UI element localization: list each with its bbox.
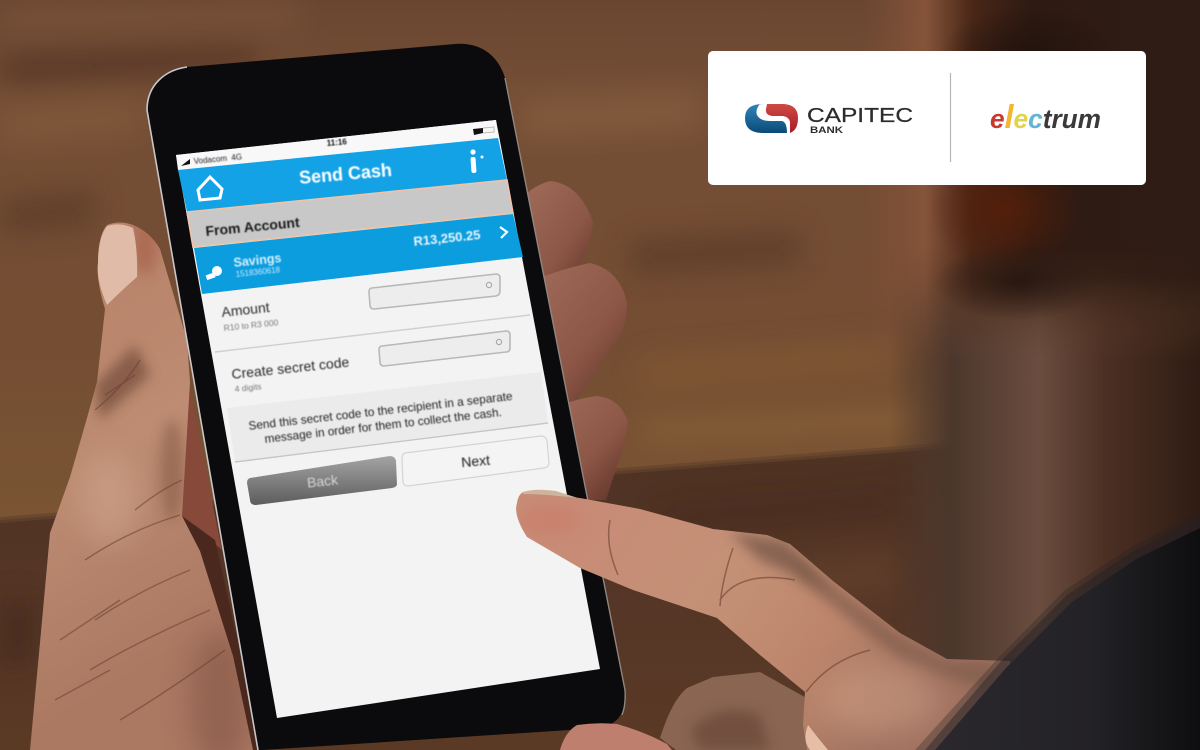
next button: Next — [461, 452, 491, 470]
instruction text block: message in order for them to collect the cash. — [264, 405, 502, 446]
savings account row: Savings — [233, 251, 282, 270]
savings account row — [194, 214, 523, 294]
thumb at bottom — [560, 723, 672, 750]
back button — [247, 456, 397, 505]
secret code field: Create secret code — [231, 354, 350, 382]
status bar: 11:16 — [326, 137, 348, 148]
lower hand knuckles — [660, 672, 820, 750]
logo: Capitec Bank — [745, 104, 913, 135]
icon: info — [470, 149, 484, 173]
amount field: Amount — [221, 299, 270, 320]
fingernail — [523, 490, 578, 498]
thumbnail — [98, 224, 137, 305]
status bar: Vodacom 4G — [193, 152, 242, 166]
status bar — [176, 120, 498, 170]
left hand and thumb — [30, 215, 262, 750]
back button: Back — [306, 471, 340, 491]
logo: electrum: electrum — [990, 98, 1101, 135]
savings account row: 1518360618 — [235, 265, 281, 279]
heading: Send Cash: Send Cash — [298, 160, 393, 188]
from account band — [187, 180, 513, 247]
icon: key — [206, 266, 222, 280]
fingers behind the phone — [510, 181, 628, 500]
jacket at lower right — [915, 512, 1200, 750]
instruction text block — [227, 372, 548, 461]
next button — [402, 436, 549, 486]
logo: Capitec Bank: CAPITEC — [807, 105, 913, 127]
pointing hand — [516, 490, 1010, 750]
phone screen — [176, 120, 600, 718]
phone body — [147, 44, 625, 750]
logo card — [708, 51, 1146, 185]
icon: home — [198, 177, 222, 200]
savings account row: R13,250.25 — [413, 227, 481, 249]
secret code field: 4 digits — [234, 381, 262, 394]
amount field: R10 to R3 000 — [223, 317, 279, 333]
amount field — [221, 274, 500, 333]
from account band: From Account — [205, 214, 301, 239]
secret code field — [231, 331, 510, 394]
app header — [178, 138, 507, 212]
instruction text block: Send this secret code to the recipient in a separate — [248, 389, 514, 433]
blurred person in the foreground — [886, 0, 1200, 660]
logo: Capitec Bank: BANK — [810, 125, 844, 135]
